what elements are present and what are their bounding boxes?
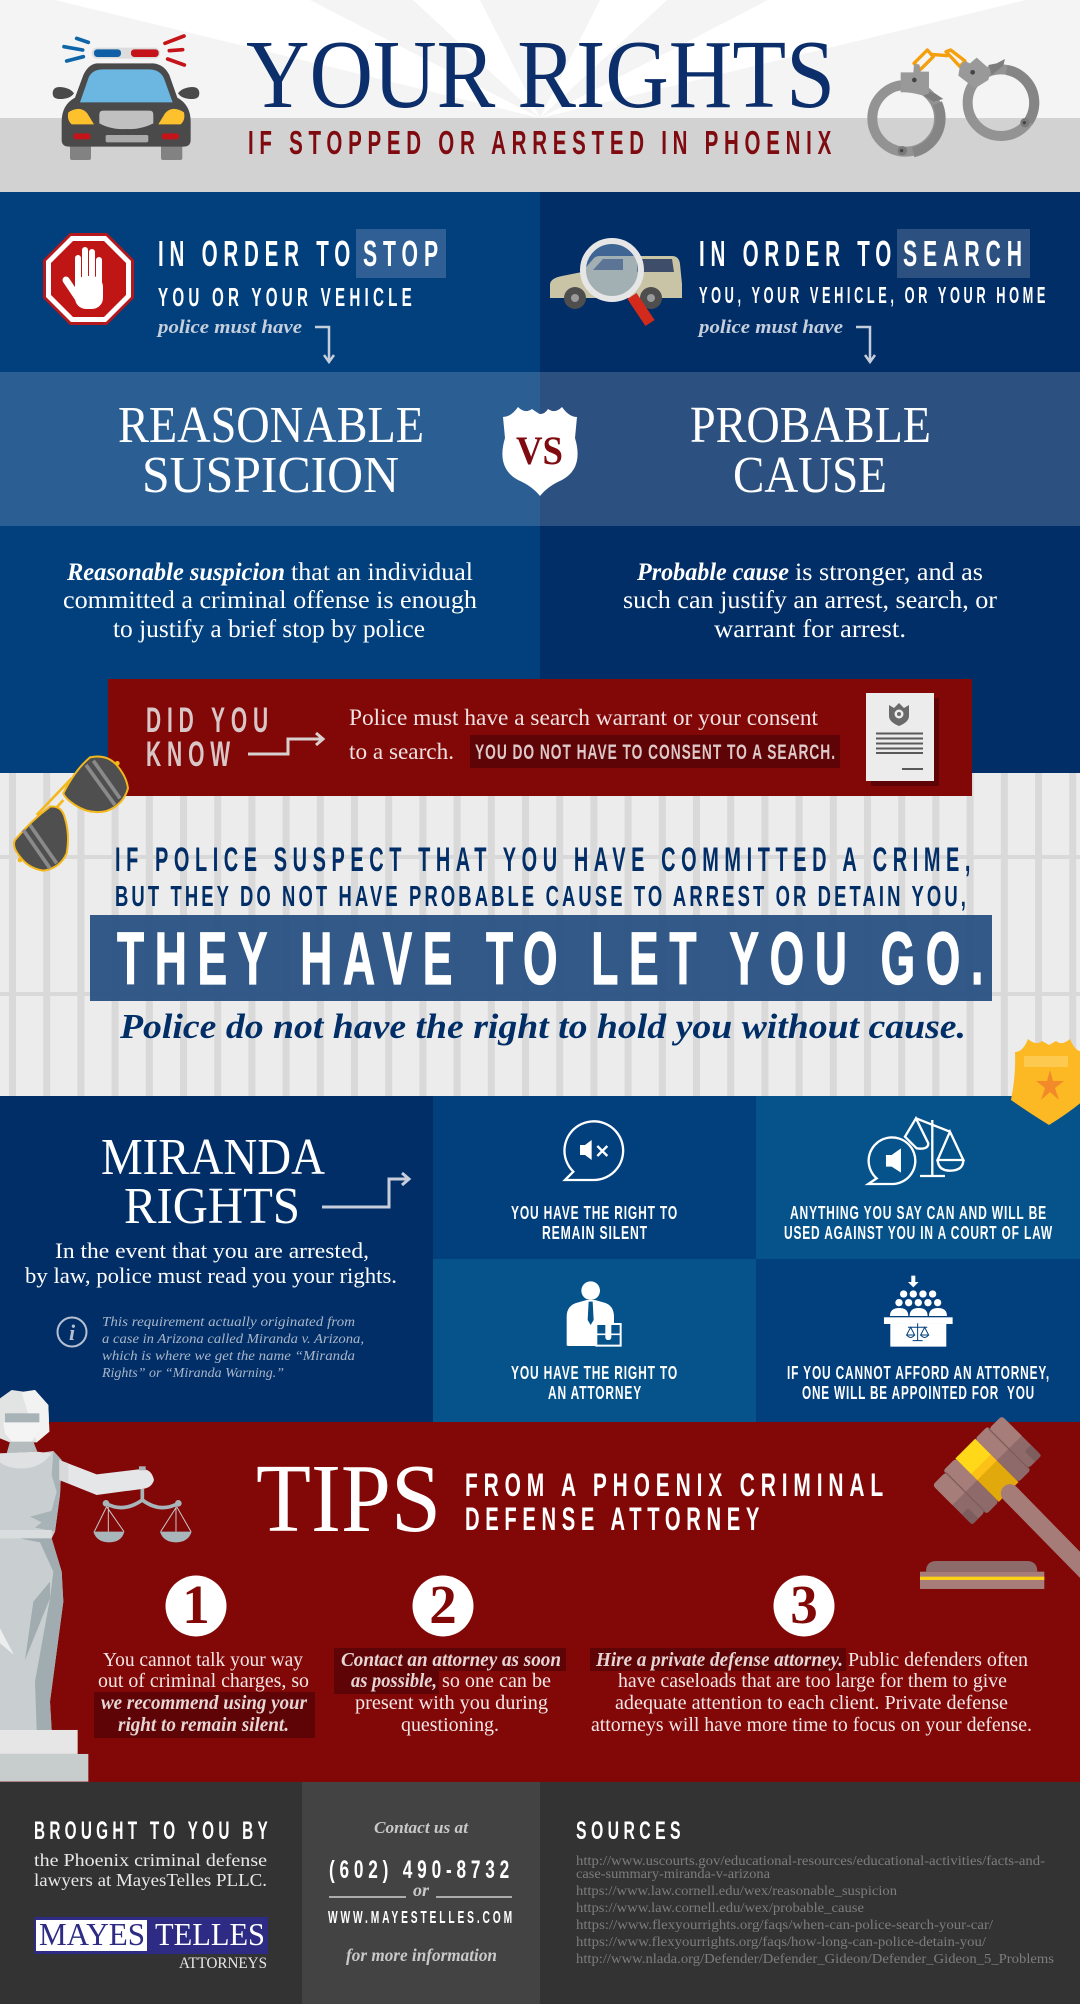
icon: vs shield [502,407,578,496]
text: miranda origin note: a case in Arizona called Miranda v. Arizona, [102,1332,364,1347]
logo: mayes telles attorneys: ATTORNEYS [179,1955,267,1972]
label: police must have: police must have [697,317,844,338]
panel: right to remain silent [433,1096,756,1259]
text: source links: http://www.uscourts.gov/educational-resources/educational-activities/facts-and- [576,1854,1045,1869]
highlight: you do not have to consent: YOU DO NOT HAVE TO CONSENT TO A SEARCH. [475,741,836,764]
tip 2: as possible, [351,1670,437,1692]
tip 3: adequate attention to each client. Private defense [615,1692,1008,1714]
tip 1: right to remain silent. [118,1714,289,1736]
text: attorney appointed [787,1363,1050,1403]
tip 1: 1 [182,1574,210,1635]
text: miranda origin note [101,1315,364,1381]
tip 1: out of criminal charges, so [98,1670,309,1692]
panel: miranda rights [0,1096,433,1422]
panel: footer sources [576,1817,1054,1967]
text: right to an attorney: YOU HAVE THE RIGHT TO [511,1363,678,1383]
text: must read you your rights: In the event that you are arrested, [55,1238,369,1263]
text: reasonable suspicion description: that an individual [291,559,473,586]
text: search warrant: Police must have a search warrant or your consent [349,705,819,730]
heading: reasonable suspicion [118,397,424,504]
label: police must have: police must have [156,317,303,338]
text: search warrant: to a search. [349,739,454,764]
heading: reasonable suspicion: SUSPICION [142,447,399,504]
panel: footer contact: Contact us at [374,1818,469,1837]
heading: miranda rights: RIGHTS [124,1178,300,1235]
text: reasonable suspicion description: Reasonable suspicion [66,559,285,586]
tip 3 [590,1574,1032,1736]
heading: tips: TIPS [256,1445,441,1552]
tip 3: attorneys will have more time to focus on your defense. [591,1714,1032,1736]
panel: let you go background [0,773,1080,1096]
tip 2: Contact an attorney as soon [341,1649,561,1671]
text: probable cause description: such can justify an arrest, search, or [623,587,998,614]
arrow: miranda rights [322,1173,409,1207]
panel: footer brought to you by [0,1782,1080,2004]
icon: gold badge [1011,1039,1080,1125]
text: source links: https://www.law.cornell.edu/wex/probable_cause [576,1901,864,1916]
arrow: did you know [248,733,323,754]
panel: footer contact: for more information [346,1945,497,1965]
heading: probable cause: PROBABLE [690,397,931,454]
text: firm description: the Phoenix criminal defense [34,1850,267,1870]
panel: footer contact [302,1782,540,2004]
text: firm description [34,1850,267,1890]
logo: mayes telles attorneys: TELLES [155,1916,265,1952]
logo: mayes telles attorneys: MAYES [39,1916,145,1952]
text: remain silent: REMAIN SILENT [542,1223,648,1243]
heading: did you know [146,701,274,774]
text: probable cause description: warrant for arrest. [714,616,906,643]
text: phone number: (602) 490-8732 [329,1856,514,1884]
tip 3: have caseloads that are too large for them to give [618,1670,1007,1692]
heading: from a phoenix criminal defense attorney: DEFENSE ATTORNEY [465,1501,765,1537]
text: must read you your rights: by law, police must read you your rights. [25,1263,397,1288]
panel: right to an attorney [433,1259,756,1422]
text: reasonable suspicion description: to justify a brief stop by police [113,616,425,643]
tip 2: present with you during [355,1692,548,1714]
text: miranda origin note: which is where we get the name “Miranda [102,1349,355,1364]
icon: stop sign [43,233,134,325]
panel: tips [0,1422,1080,1782]
heading: in order to stop: IN ORDER TO [158,233,356,274]
text: remain silent: YOU HAVE THE RIGHT TO [511,1203,678,1223]
tip 3: Public defenders often [848,1649,1028,1671]
icon: info: i [69,1320,76,1345]
text: source links: https://www.flexyourrights.org/faqs/when-can-police-search-your-car/ [576,1918,993,1933]
icon: sunglasses [14,757,128,871]
tip 1: You cannot talk your way [103,1649,303,1671]
icon: info [58,1318,86,1346]
text: source links [576,1854,1054,1967]
heading: miranda rights [101,1129,325,1235]
panel: footer sources: SOURCES [576,1817,685,1845]
heading: probable cause: CAUSE [733,447,887,504]
text: must read you your rights [25,1238,397,1288]
icon: car under magnifying glass [550,241,682,323]
text: remain silent [511,1203,678,1243]
text: search warrant [349,705,819,764]
panel: did you know [108,679,972,796]
icon: muted speech bubble [564,1121,623,1180]
text: source links: https://www.law.cornell.edu/wex/reasonable_suspicion [576,1884,897,1899]
tip 1 [94,1574,315,1738]
panel: search column [0,192,1080,773]
heading: miranda rights: MIRANDA [101,1129,325,1186]
highlight: you do not have to consent [470,735,840,768]
text: right to an attorney [511,1363,678,1403]
text: probable cause description [623,559,998,643]
heading: did you know: KNOW [146,735,236,774]
text: miranda origin note: Rights” or “Miranda Warning.” [101,1366,284,1381]
text: miranda origin note: This requirement actually originated from [102,1315,355,1330]
heading: probable cause [690,397,931,504]
text: website: WWW.MAYESTELLES.COM [328,1907,515,1927]
panel: footer brought to you by: BROUGHT TO YOU BY [34,1817,272,1845]
heading: in order to search: IN ORDER TO [699,233,897,274]
icon: speech bubble with scales [868,1118,963,1184]
tip 1: we recommend using your [101,1692,307,1714]
heading: reasonable suspicion: REASONABLE [118,397,424,454]
icon: balance scales [93,1489,192,1542]
panel: attorney appointed [756,1259,1080,1422]
heading: in order to stop: STOP [363,233,444,274]
icon: court bench [884,1276,953,1347]
panel: used against you [756,1096,1080,1259]
icon: police car [53,36,199,160]
text: probable cause description: Probable cause [636,559,789,586]
icon: warrant document [866,693,939,786]
tip 3: Hire a private defense attorney. [595,1649,843,1671]
panel: stop column [0,192,540,679]
arrow: down to probable cause [856,327,875,362]
icon: vs shield: VS [516,428,563,473]
highlight: search [897,229,1030,278]
icon: gavel [920,1414,1080,1589]
tip 2 [334,1574,566,1736]
panel: header [0,0,1080,192]
highlight: stop [356,229,446,278]
text: probable cause description: is stronger, and as [795,559,983,586]
text: firm description: lawyers at MayesTelles PLLC. [34,1870,267,1890]
tip 3: 3 [790,1574,818,1635]
icon: handcuffs [872,50,1034,155]
text: right to an attorney: AN ATTORNEY [548,1383,642,1403]
heading: did you know: DID YOU [146,701,274,740]
text: used against you [784,1203,1053,1243]
subheading: you or your vehicle: YOU OR YOUR VEHICLE [158,282,416,312]
text: source links: http://www.nlada.org/Defender/Defender_Gideon/Defender_Gideon_5_Problems [576,1952,1054,1967]
tip 2: so one can be [442,1670,551,1692]
arrow: down to reasonable suspicion [315,327,334,362]
text: reasonable suspicion description: committed a criminal offense is enough [63,587,478,614]
logo: mayes telles attorneys [34,1916,268,1972]
text: police do not have the right: Police do not have the right to hold you without cause. [119,1007,966,1046]
tip 2: 2 [429,1574,457,1635]
icon: attorney with briefcase [567,1281,621,1346]
icon: lady justice statue [0,1390,192,1782]
text: or divider: or [413,1880,430,1900]
tip 2: questioning. [401,1714,499,1736]
text: source links: https://www.flexyourrights.org/faqs/how-long-can-police-detain-you/ [576,1935,986,1950]
heading: from a phoenix criminal defense attorney [465,1467,889,1537]
text: reasonable suspicion description [63,559,478,643]
title: YOUR RIGHTS [246,21,835,129]
text: source links: case-summary-miranda-v-arizona [576,1867,771,1882]
